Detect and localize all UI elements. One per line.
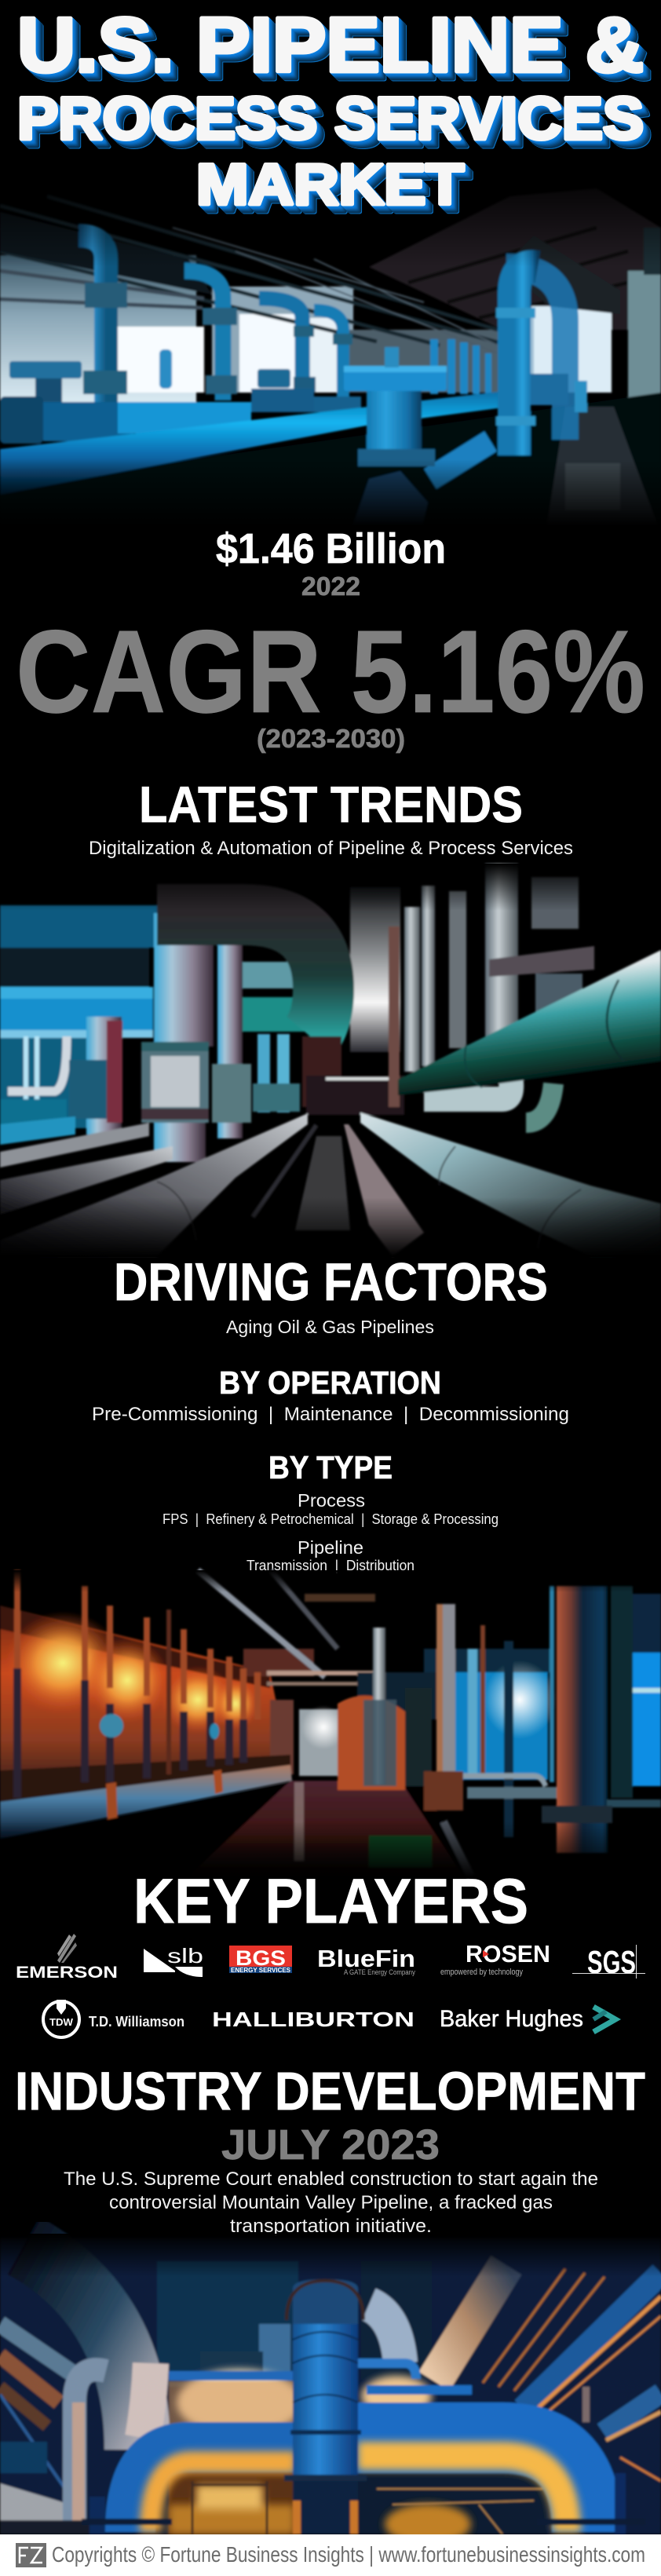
heading: DRIVING FACTORS	[114, 1252, 548, 1312]
image: blue pipeline hall	[0, 165, 661, 538]
process list: FPS | Refinery & Petrochemical | Storage & Processing	[163, 1511, 498, 1527]
image: refinery pipes in perspective	[0, 864, 661, 1257]
icon: Fortune Business Insights logo	[16, 2543, 46, 2567]
heading: BY TYPE	[268, 1449, 393, 1485]
logo: Rosen: empowered by technology	[440, 1968, 523, 1977]
latest trends section	[89, 776, 573, 859]
logo: Rosen	[440, 1940, 550, 1977]
logo: Rosen: ROSEN	[466, 1940, 550, 1968]
pipeline label: Pipeline	[298, 1537, 363, 1558]
title line 1: U.S. PIPELINE &	[17, 2, 644, 88]
trend text: Digitalization & Automation of Pipeline & Process Services	[89, 838, 573, 859]
logo: Emerson: EMERSON	[16, 1964, 118, 1982]
key players section	[16, 1866, 645, 2037]
logo: Emerson	[16, 1934, 118, 1982]
logo: BlueFin: BlueFin	[317, 1945, 415, 1972]
logo: SLB: slb	[167, 1944, 203, 1968]
logo: T.D. Williamson	[43, 2000, 184, 2037]
logo: Baker Hughes: Baker Hughes	[440, 2006, 583, 2032]
development text	[64, 2169, 598, 2237]
logo: BGS: BGS	[236, 1946, 286, 1970]
logo: T.D. Williamson: T.D. Williamson	[89, 2014, 184, 2030]
CAGR stat	[16, 605, 645, 753]
development text: controversial Mountain Valley Pipeline, a fracked gas	[109, 2192, 553, 2213]
value: $1.46 Billion	[216, 525, 446, 572]
driving factors section	[114, 1252, 548, 1337]
logo: T.D. Williamson: TDW	[49, 2016, 74, 2028]
development text: transportation initiative.	[230, 2216, 432, 2237]
title	[17, 2, 644, 217]
market value stat	[216, 525, 446, 601]
heading: BY OPERATION	[219, 1365, 441, 1401]
heading: LATEST TRENDS	[139, 776, 523, 833]
by operation section	[92, 1365, 569, 1425]
title line 2: PROCESS SERVICES	[17, 86, 644, 152]
logo: Halliburton: HALLIBURTON	[212, 2008, 414, 2031]
development text: The U.S. Supreme Court enabled construction to start again the	[64, 2169, 598, 2190]
logo: BGS	[229, 1946, 292, 1974]
logo: SLB	[144, 1944, 203, 1977]
image: blue and orange glowing pipes	[0, 2234, 661, 2545]
pipeline list: Transmission | Distribution	[247, 1558, 414, 1573]
logo: SGS: SGS	[587, 1944, 636, 1980]
footer band	[0, 2534, 661, 2576]
CAGR period: (2023-2030)	[257, 724, 405, 753]
process label: Process	[298, 1490, 365, 1511]
date: JULY 2023	[221, 2121, 440, 2169]
logo: BlueFin: A GATE Energy Company	[344, 1968, 415, 1976]
industry development section	[15, 2061, 645, 2237]
logo: BGS: ENERGY SERVICES	[231, 1967, 291, 1974]
image: orange and blue lit pipe corridor	[0, 1570, 661, 1878]
title line 3: MARKET	[196, 153, 464, 217]
driving factor text: Aging Oil & Gas Pipelines	[226, 1317, 434, 1337]
value year: 2022	[301, 572, 360, 601]
operation list: Pre-Commissioning | Maintenance | Decommissioning	[92, 1404, 569, 1425]
by type section	[163, 1449, 498, 1573]
heading: KEY PLAYERS	[133, 1866, 528, 1937]
